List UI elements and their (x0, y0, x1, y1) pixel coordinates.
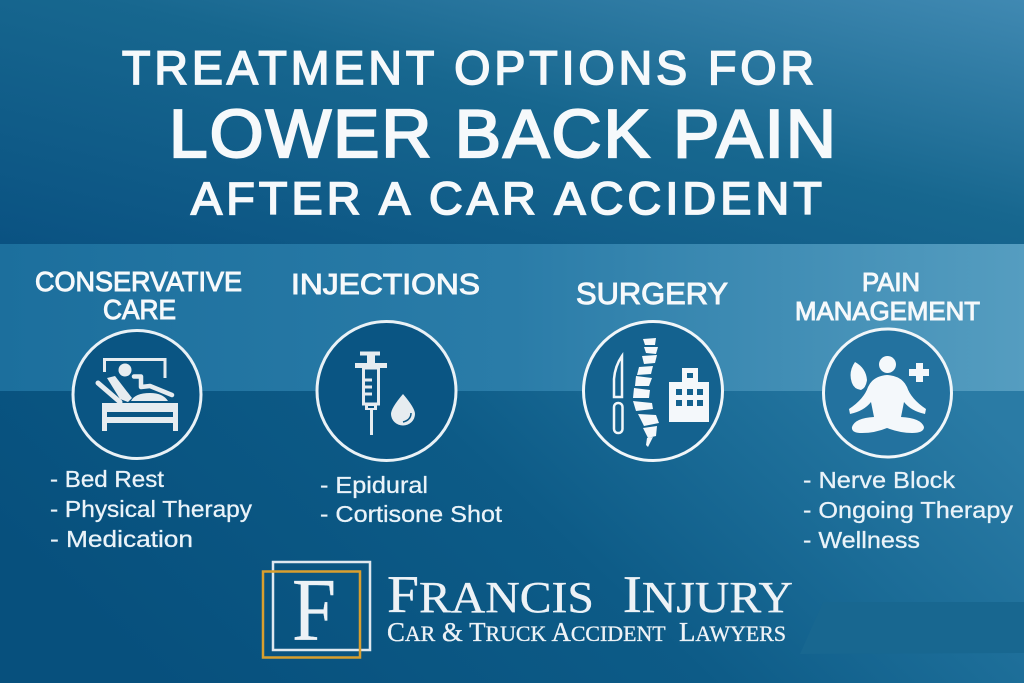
list: injections (320, 472, 502, 527)
list: pain management: - Ongoing Therapy (803, 497, 1013, 523)
list: injections: - Cortisone Shot (320, 501, 502, 527)
list: pain management (803, 467, 1013, 553)
icon: scalpel, spine and hospital (584, 322, 722, 460)
list: conservative care: - Bed Rest (50, 466, 164, 492)
logo mark (263, 561, 370, 660)
icon: patient in bed (73, 330, 201, 458)
heading: conservative care: CARE (103, 294, 176, 325)
list: conservative care (50, 466, 252, 552)
heading: pain management (795, 267, 980, 326)
title: AFTER A CAR ACCIDENT (191, 173, 826, 224)
panel: conservative care (35, 266, 252, 552)
list: pain management: - Wellness (803, 527, 920, 553)
title: TREATMENT OPTIONS FOR (122, 41, 818, 94)
heading: pain management: PAIN (862, 267, 920, 297)
logo tagline: CAR & TRUCK ACCIDENT LAWYERS (387, 617, 786, 647)
title (122, 41, 838, 224)
logo name: FRANCIS INJURY (387, 566, 793, 624)
icon: syringe and drop (317, 322, 456, 460)
heading: surgery: SURGERY (576, 276, 728, 311)
list: conservative care: - Medication (50, 526, 193, 552)
panel: injections (291, 269, 502, 527)
list: pain management: - Nerve Block (803, 467, 955, 493)
title: LOWER BACK PAIN (169, 96, 838, 172)
logo: Francis Injury (263, 561, 793, 660)
icon: meditation, leaf and plus (824, 329, 952, 457)
heading: conservative care: CONSERVATIVE (35, 266, 242, 297)
list: injections: - Epidural (320, 472, 428, 498)
panel: pain management (795, 267, 1013, 553)
logo mark: F (292, 561, 336, 660)
heading: injections: INJECTIONS (291, 269, 480, 301)
list: conservative care: - Physical Therapy (50, 496, 252, 522)
heading: conservative care (35, 266, 242, 325)
heading: pain management: MANAGEMENT (795, 296, 980, 326)
panel: surgery (576, 276, 728, 460)
